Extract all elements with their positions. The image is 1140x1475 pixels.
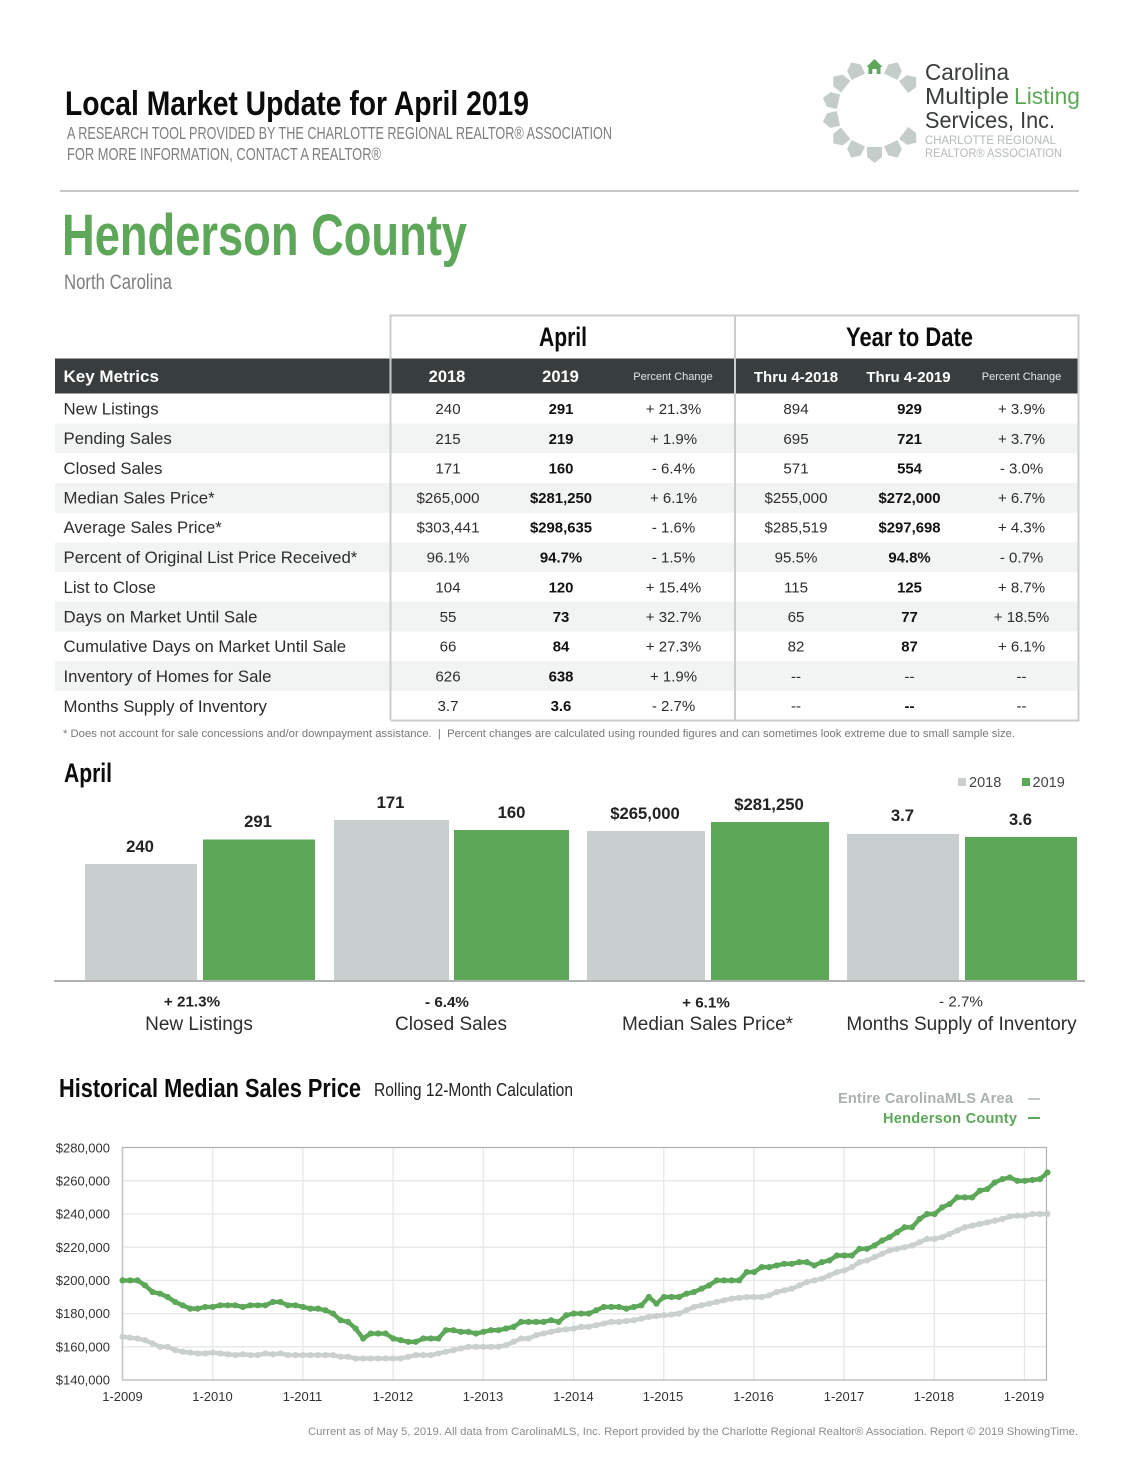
row: Cumulative Days on Market Until Sale: 84 bbox=[553, 640, 570, 656]
row: Months Supply of Inventory bbox=[64, 697, 1026, 716]
row: Average Sales Price: - 1.6% bbox=[652, 520, 695, 536]
row: List to Close: + 15.4% bbox=[646, 580, 701, 596]
caption: New Listings bbox=[145, 994, 253, 1035]
row: List to Close: List to Close bbox=[64, 578, 156, 597]
row: Pending Sales bbox=[64, 429, 1045, 448]
row: New Listings: 291 bbox=[549, 402, 573, 418]
row: Months Supply of Inventory: 3.6 bbox=[551, 699, 571, 715]
chart legend: 2018 / 2019 bbox=[958, 775, 1065, 791]
row: Pending Sales: Pending Sales bbox=[64, 429, 172, 448]
row: Cumulative Days on Market Until Sale: 66 bbox=[440, 638, 456, 656]
row: New Listings: + 3.9% bbox=[998, 401, 1045, 418]
bars: Median Sales Price: $265,000 bbox=[610, 804, 680, 823]
row: Percent of Original List Price Received: Percent of Original List Price Received* bbox=[64, 548, 358, 567]
row: Average Sales Price: $297,698 bbox=[878, 520, 941, 536]
caption: New Listings: New Listings bbox=[145, 1014, 253, 1035]
x axis labels: 1-2010 bbox=[192, 1389, 233, 1404]
row: Days on Market Until Sale: 55 bbox=[440, 609, 456, 626]
row: Percent of Original List Price Received: 94.7% bbox=[540, 550, 582, 566]
column headers: 2019 bbox=[542, 368, 579, 386]
row: New Listings: 240 bbox=[435, 401, 461, 418]
x axis labels: 1-2015 bbox=[643, 1389, 683, 1404]
y axis labels: $220,000 bbox=[56, 1240, 110, 1255]
sub-heading: Rolling 12-Month Calculation: Rolling 12-Month Calculation bbox=[374, 1080, 573, 1100]
row: Cumulative Days on Market Until Sale: 82 bbox=[788, 638, 804, 656]
table header bar bbox=[55, 358, 1078, 394]
column headers: Percent Change bbox=[633, 371, 713, 383]
logo wordmark: Multiple bbox=[925, 83, 1009, 109]
column headers: Percent Change bbox=[982, 371, 1061, 383]
heading: April bar chart: April bbox=[64, 758, 112, 788]
row: Closed Sales: 554 bbox=[897, 462, 923, 478]
logo wordmark: REALTOR® ASSOCIATION bbox=[925, 148, 1062, 160]
row: Percent of Original List Price Received: 95.5% bbox=[775, 550, 817, 566]
column headers bbox=[64, 367, 1061, 386]
row: Closed Sales bbox=[64, 459, 1043, 478]
table frame bbox=[390, 316, 1078, 720]
row: Average Sales Price: $303,441 bbox=[417, 520, 479, 536]
x axis labels: 1-2018 bbox=[914, 1389, 954, 1404]
caption: Closed Sales: - 6.4% bbox=[425, 994, 469, 1011]
caption: New Listings: + 21.3% bbox=[164, 994, 221, 1010]
icon: ring of houses bbox=[821, 59, 921, 163]
row: Closed Sales: 171 bbox=[435, 460, 461, 478]
row: Months Supply of Inventory: -- bbox=[791, 698, 801, 715]
row: Average Sales Price: $285,519 bbox=[765, 520, 827, 536]
column headers: Thru 4-2019 bbox=[866, 369, 951, 386]
row: List to Close: 125 bbox=[897, 580, 922, 596]
row: Inventory of Homes for Sale: Inventory of Homes for Sale bbox=[64, 667, 272, 686]
y axis labels: $200,000 bbox=[56, 1273, 110, 1288]
y axis labels bbox=[56, 1140, 110, 1388]
row: Median Sales Price: + 6.1% bbox=[650, 490, 697, 507]
heading: Henderson County: Henderson County bbox=[62, 203, 467, 268]
row: Median Sales Price bbox=[64, 488, 1045, 508]
row: Pending Sales: + 1.9% bbox=[650, 431, 697, 448]
caption: Months Supply of Inventory: Months Supply of Inventory bbox=[846, 1014, 1077, 1035]
heading: Historical Median Sales Price: Historical Median Sales Price bbox=[59, 1075, 361, 1103]
bars: Months Supply of Inventory bbox=[847, 806, 1077, 981]
row: Average Sales Price: + 4.3% bbox=[998, 520, 1045, 536]
subtitle: A RESEARCH TOOL PROVIDED BY THE CHARLOTTE REGIONAL REALTOR® ASSOCIATION bbox=[67, 123, 612, 143]
bars: Closed Sales: 160 bbox=[498, 803, 525, 822]
subtitle bbox=[67, 123, 612, 164]
x axis labels: 1-2013 bbox=[463, 1389, 503, 1404]
column headers: Thru 4-2018 bbox=[754, 369, 838, 386]
row: Average Sales Price: Average Sales Price* bbox=[64, 518, 222, 537]
series: Henderson County bbox=[122, 1172, 1047, 1342]
row: Percent of Original List Price Received: 94.8% bbox=[888, 550, 931, 566]
row: New Listings: 894 bbox=[783, 401, 809, 418]
row: Closed Sales: 571 bbox=[783, 460, 809, 478]
row stripes bbox=[55, 424, 1078, 691]
row: Inventory of Homes for Sale: -- bbox=[1016, 668, 1026, 686]
series: Entire CarolinaMLS Area bbox=[122, 1214, 1047, 1358]
bar chart bbox=[54, 793, 1085, 1035]
x axis labels bbox=[102, 1389, 1044, 1404]
caption: Closed Sales: Closed Sales bbox=[395, 1014, 507, 1035]
x axis labels: 1-2016 bbox=[733, 1389, 774, 1404]
row: Cumulative Days on Market Until Sale: + 6.1% bbox=[998, 638, 1045, 656]
row: Average Sales Price bbox=[64, 518, 1045, 537]
footer source note: Current as of May 5, 2019. All data from CarolinaMLS, Inc. Report provided by the Charlotte Regional Realtor® Association. Report © 2019 ShowingTime. bbox=[308, 1426, 1078, 1438]
row: Days on Market Until Sale bbox=[64, 608, 1049, 626]
line chart: historical median sales price bbox=[56, 1140, 1047, 1404]
row: Inventory of Homes for Sale bbox=[64, 667, 1026, 686]
row: Days on Market Until Sale: 65 bbox=[788, 609, 804, 626]
row: Cumulative Days on Market Until Sale: Cumulative Days on Market Until Sale bbox=[64, 637, 346, 656]
bars: Months Supply of Inventory: 3.7 bbox=[891, 806, 914, 825]
bars: New Listings: 240 bbox=[126, 837, 154, 856]
row: Months Supply of Inventory: Months Supply of Inventory bbox=[64, 697, 267, 716]
y axis labels: $280,000 bbox=[56, 1140, 110, 1156]
caption: Median Sales Price: Median Sales Price* bbox=[622, 1014, 794, 1035]
column group heading: April: April bbox=[539, 322, 587, 352]
row: List to Close: + 8.7% bbox=[998, 580, 1045, 596]
column headers: 2018 bbox=[429, 368, 465, 386]
y axis labels: $160,000 bbox=[56, 1340, 110, 1354]
line chart legend: Entire CarolinaMLS Area bbox=[838, 1091, 1014, 1107]
subtitle: FOR MORE INFORMATION, CONTACT A REALTOR® bbox=[67, 144, 381, 164]
column headers: Key Metrics bbox=[64, 367, 159, 386]
column group heading: Year to Date: Year to Date bbox=[846, 322, 973, 352]
row: Pending Sales: 721 bbox=[897, 432, 922, 448]
row: Cumulative Days on Market Until Sale: + 27.3% bbox=[646, 638, 701, 656]
row: Median Sales Price: $265,000 bbox=[417, 490, 479, 507]
y axis labels: $140,000 bbox=[56, 1372, 110, 1388]
x axis labels: 1-2009 bbox=[102, 1389, 143, 1404]
caption: Months Supply of Inventory: - 2.7% bbox=[939, 994, 983, 1010]
row: New Listings bbox=[64, 400, 1045, 418]
caption: Median Sales Price bbox=[622, 994, 794, 1035]
row: Pending Sales: 215 bbox=[435, 431, 461, 448]
sub-heading: North Carolina: North Carolina bbox=[64, 271, 172, 294]
row: Percent of Original List Price Received: - 1.5% bbox=[652, 550, 695, 566]
bars: Median Sales Price: $281,250 bbox=[734, 795, 804, 814]
x axis labels: 1-2011 bbox=[283, 1389, 322, 1404]
caption: Months Supply of Inventory bbox=[846, 994, 1077, 1035]
y axis labels: $240,000 bbox=[56, 1206, 110, 1222]
chart legend: 2018 / 2019: 2019 bbox=[1032, 775, 1065, 791]
caption: Closed Sales bbox=[395, 994, 507, 1035]
row: Days on Market Until Sale: Days on Market Until Sale bbox=[64, 608, 258, 626]
row: Closed Sales: Closed Sales bbox=[64, 459, 162, 478]
x axis labels: 1-2019 bbox=[1004, 1389, 1044, 1404]
row: Median Sales Price: + 6.7% bbox=[998, 490, 1045, 507]
logo wordmark: CHARLOTTE REGIONAL bbox=[925, 135, 1057, 147]
y axis labels: $260,000 bbox=[56, 1174, 110, 1188]
row: Inventory of Homes for Sale: 638 bbox=[549, 670, 573, 686]
row: List to Close bbox=[64, 578, 1045, 597]
row: Days on Market Until Sale: + 18.5% bbox=[994, 609, 1049, 626]
row: Percent of Original List Price Received: - 0.7% bbox=[1000, 550, 1043, 566]
row: New Listings: New Listings bbox=[64, 400, 159, 418]
panel: key metrics table bbox=[55, 316, 1078, 720]
row: Percent of Original List Price Received: 96.1% bbox=[427, 550, 469, 566]
row: Months Supply of Inventory: 3.7 bbox=[438, 698, 458, 715]
logo wordmark: Listing bbox=[1014, 83, 1080, 109]
row: Percent of Original List Price Received bbox=[64, 548, 1043, 567]
bars: New Listings: 291 bbox=[244, 812, 272, 831]
row: Median Sales Price: $255,000 bbox=[765, 490, 827, 507]
logo wordmark bbox=[925, 59, 1080, 160]
bars: Closed Sales: 171 bbox=[377, 793, 404, 812]
row: List to Close: 120 bbox=[549, 580, 573, 596]
caption: Median Sales Price: + 6.1% bbox=[682, 994, 730, 1012]
row: Inventory of Homes for Sale: 626 bbox=[435, 668, 461, 686]
row: Days on Market Until Sale: + 32.7% bbox=[646, 609, 701, 626]
logo wordmark: Services, Inc. bbox=[925, 107, 1055, 133]
row: Months Supply of Inventory: -- bbox=[905, 699, 914, 715]
line chart legend bbox=[838, 1091, 1040, 1127]
y axis labels: $180,000 bbox=[56, 1306, 110, 1321]
bars: New Listings bbox=[85, 812, 315, 981]
row: Days on Market Until Sale: 73 bbox=[553, 610, 569, 626]
logo wordmark: Carolina bbox=[925, 59, 1009, 85]
row: Pending Sales: 219 bbox=[549, 432, 573, 448]
row: Cumulative Days on Market Until Sale bbox=[64, 637, 1045, 656]
row: Months Supply of Inventory: -- bbox=[1016, 698, 1026, 715]
row: Pending Sales: 695 bbox=[783, 431, 809, 448]
bars: Median Sales Price bbox=[587, 795, 829, 981]
row: Inventory of Homes for Sale: -- bbox=[904, 668, 915, 686]
chart legend: 2018 / 2019: 2018 bbox=[969, 775, 1001, 791]
bars: Months Supply of Inventory: 3.6 bbox=[1009, 810, 1032, 829]
row: Average Sales Price: $298,635 bbox=[530, 520, 592, 536]
row: Closed Sales: - 6.4% bbox=[652, 460, 695, 478]
logo: Carolina Multiple Listing Services bbox=[821, 59, 1080, 163]
row: Cumulative Days on Market Until Sale: 87 bbox=[901, 640, 918, 656]
bars: Closed Sales bbox=[334, 793, 569, 981]
row: Median Sales Price: $281,250 bbox=[530, 491, 592, 507]
row: Days on Market Until Sale: 77 bbox=[901, 610, 918, 626]
row: Closed Sales: - 3.0% bbox=[1000, 460, 1043, 478]
row: List to Close: 115 bbox=[784, 580, 808, 596]
row: Closed Sales: 160 bbox=[549, 462, 573, 478]
grid lines bbox=[122, 1148, 1047, 1380]
row: New Listings: + 21.3% bbox=[646, 401, 701, 418]
x axis labels: 1-2017 bbox=[824, 1389, 864, 1404]
line chart legend: Henderson County bbox=[883, 1111, 1018, 1127]
x axis labels: 1-2014 bbox=[553, 1389, 594, 1404]
title: Local Market Update for April 2019 bbox=[65, 85, 529, 123]
row: Pending Sales: + 3.7% bbox=[998, 431, 1045, 448]
row: Median Sales Price: Median Sales Price* bbox=[64, 488, 215, 508]
row: Months Supply of Inventory: - 2.7% bbox=[652, 698, 695, 715]
x axis labels: 1-2012 bbox=[373, 1389, 413, 1404]
row: Median Sales Price: $272,000 bbox=[878, 491, 941, 507]
row: Inventory of Homes for Sale: + 1.9% bbox=[650, 668, 697, 686]
footnote: * Does not account for sale concessions and/or downpayment assistance. | Percent changes are calculated using rounded figures and can sometimes look extreme due to small sample size. bbox=[63, 728, 1015, 740]
row: Inventory of Homes for Sale: -- bbox=[791, 668, 801, 686]
row: List to Close: 104 bbox=[435, 580, 461, 596]
row: New Listings: 929 bbox=[897, 402, 922, 418]
